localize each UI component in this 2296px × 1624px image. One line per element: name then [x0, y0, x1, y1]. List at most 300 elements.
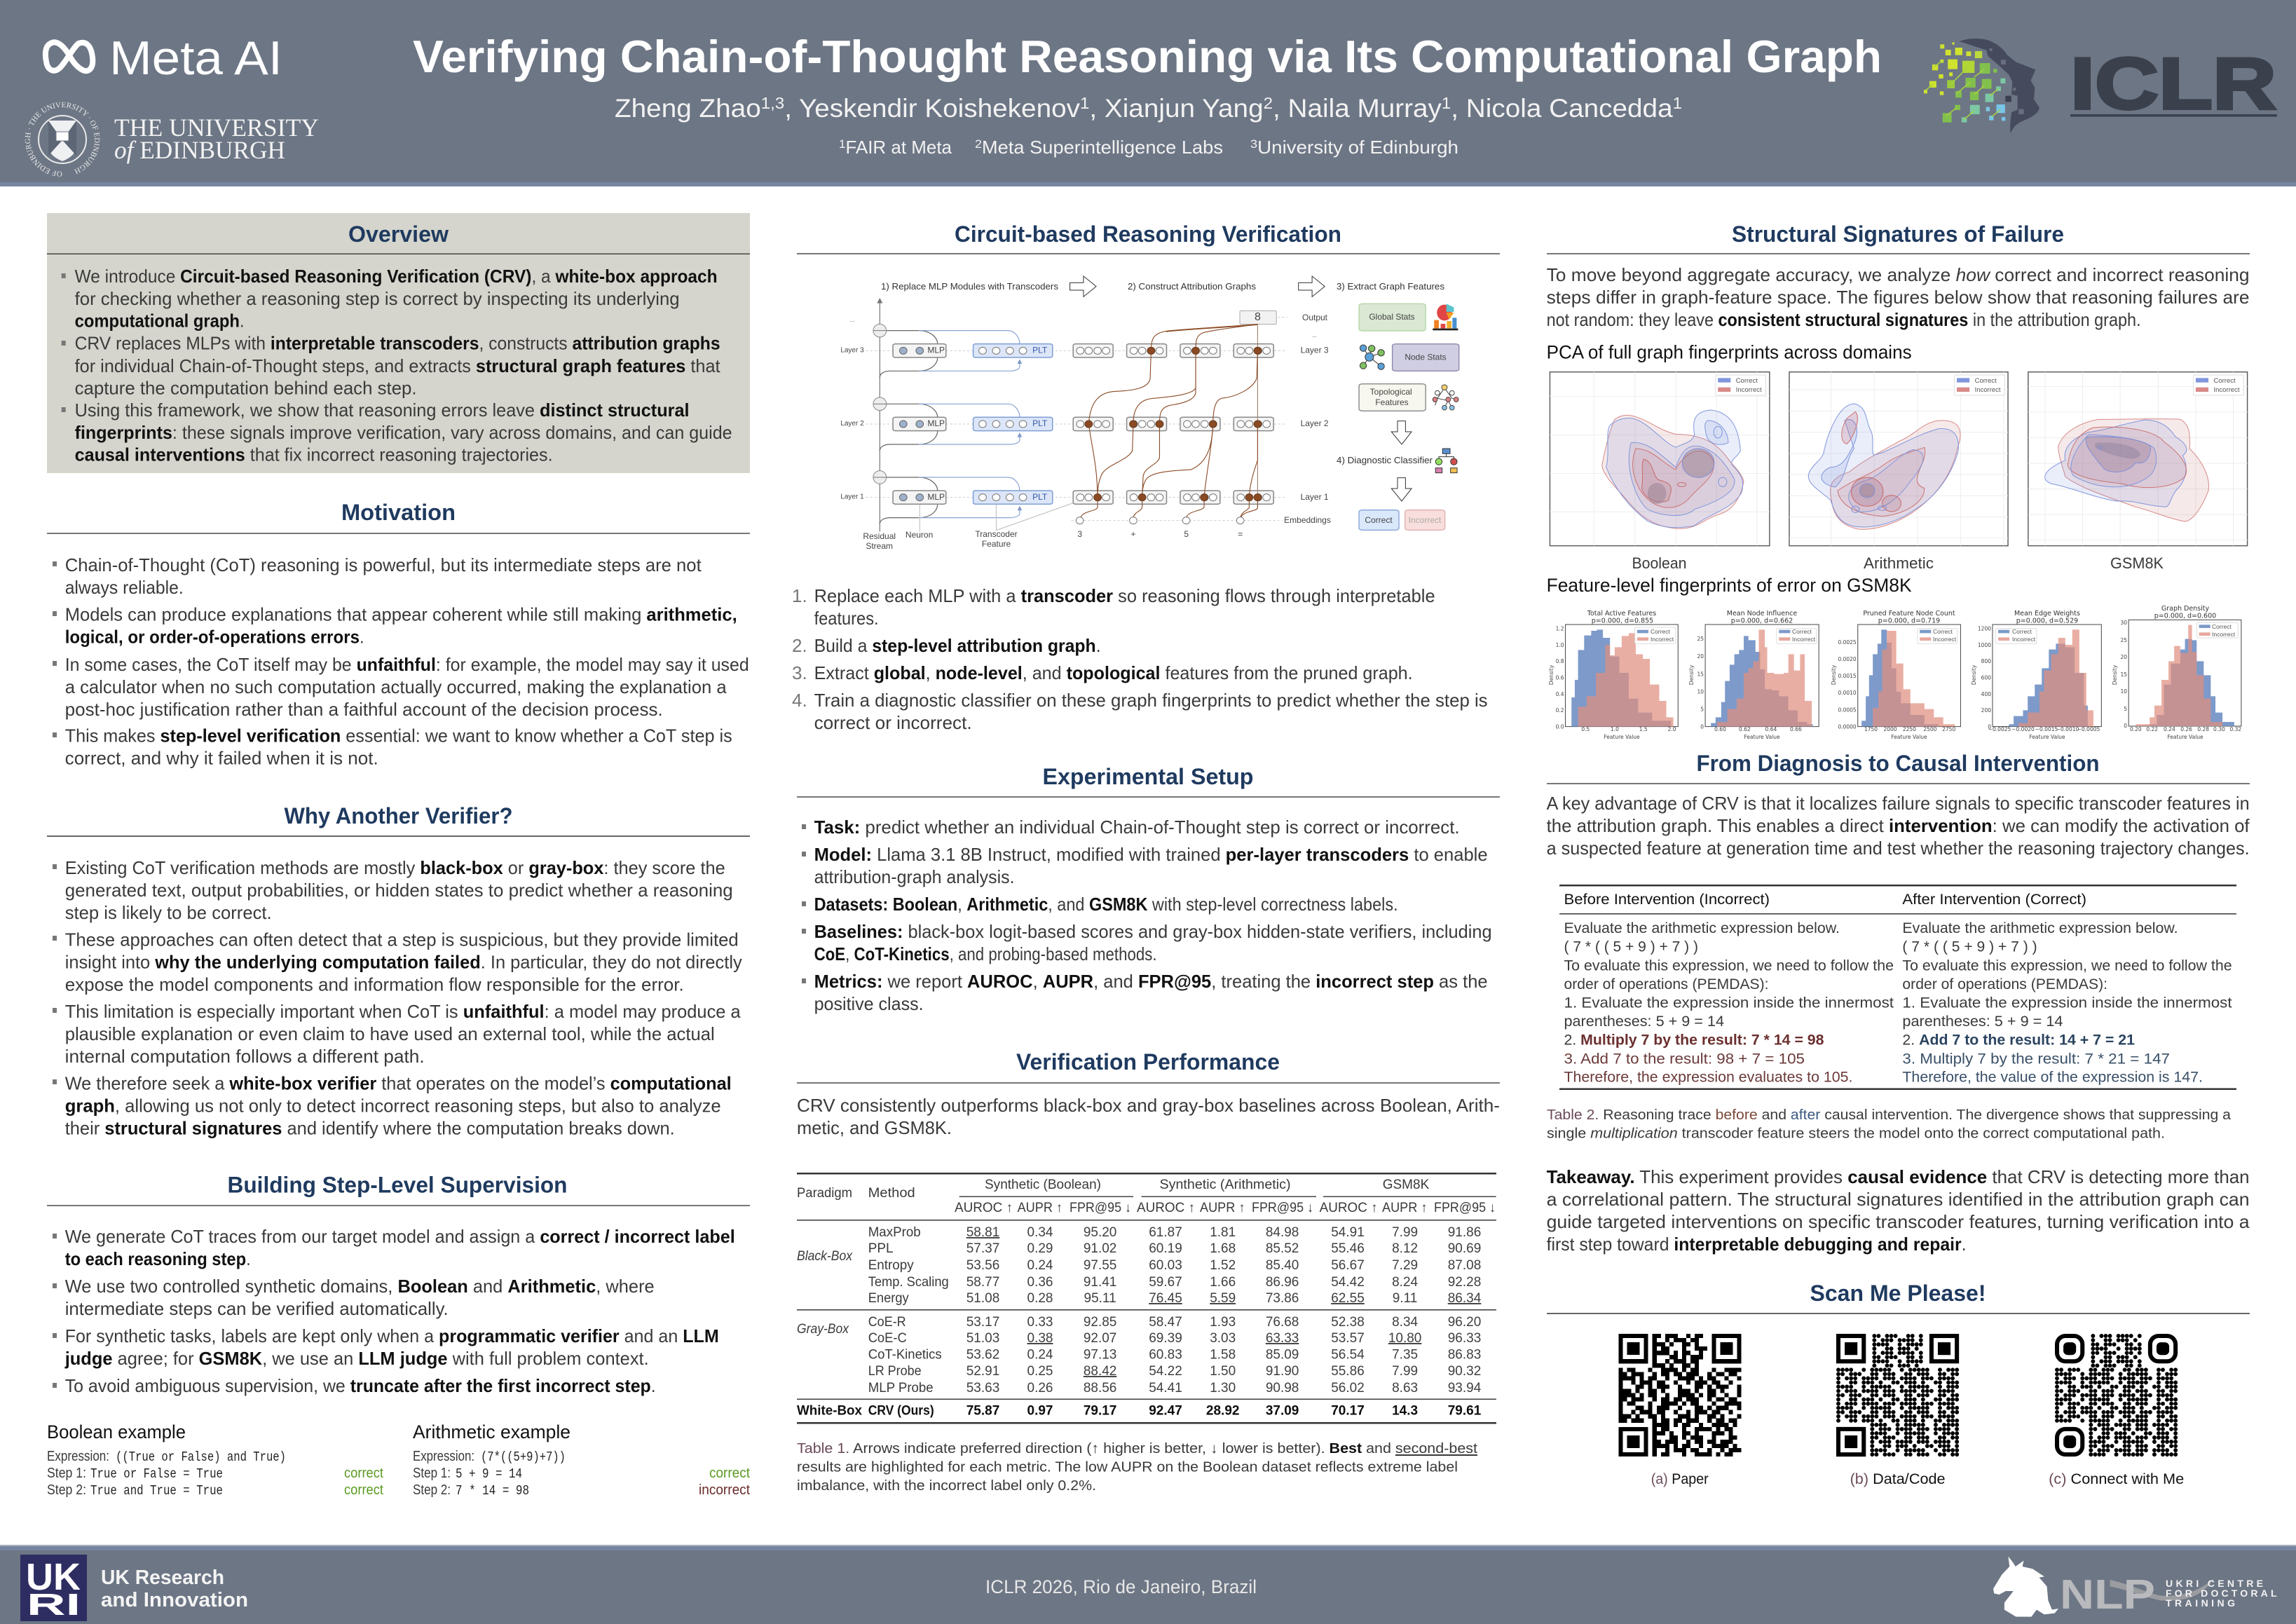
results table: 7.29: [1392, 1258, 1418, 1273]
histogram labels: 0.4: [1556, 691, 1564, 697]
histogram labels: Incorrect: [1792, 636, 1816, 643]
column: before intervention: parentheses: 5 + 9 = 14: [1564, 1014, 1724, 1030]
text: overview bullets: CRV replaces MLPs with interpretable transcoders, constructs attribution graphs: [75, 332, 720, 353]
text: motivation bullets: [53, 554, 749, 768]
icon: node graph: [1360, 345, 1384, 369]
text: supervision bullets: intermediate steps can be verified automatically.: [65, 1298, 449, 1319]
numbered steps: 4.: [792, 690, 807, 711]
heading: why another verifier: Why Another Verifier?: [285, 803, 513, 828]
results table: 37.09: [1266, 1403, 1299, 1419]
results table: 53.57: [1331, 1331, 1365, 1346]
diagram labels: Layer 3: [1301, 345, 1329, 355]
column: before intervention: To evaluate this expression, we need to follow the: [1564, 957, 1894, 974]
results table: 56.67: [1331, 1258, 1365, 1273]
table 1 caption: [797, 1440, 1477, 1494]
diagram labels: PLT: [1032, 492, 1048, 502]
panel: verification performance: [797, 1049, 1500, 1494]
text: motivation bullets: In some cases, the CoT itself may be unfaithful: for example, the model may say it used: [65, 654, 749, 675]
histogram labels: 0.5: [1581, 726, 1590, 732]
example: boolean: True and True = True: [90, 1483, 223, 1499]
text: overview bullets: for checking whether a reasoning step is correct by inspecting its underlying: [75, 288, 680, 309]
logo: University of Edinburgh: OF EDINBURGH · THE UNIVERSITY · OF EDINBURGH: [25, 102, 100, 177]
text: overview bullets: computational graph.: [75, 310, 245, 331]
results table: 86.34: [1448, 1291, 1482, 1306]
results table: 0.24: [1027, 1347, 1053, 1363]
histogram labels: 0.20: [2130, 726, 2142, 732]
QR captions: [1651, 1471, 2184, 1487]
histogram labels: Incorrect: [2012, 636, 2036, 643]
logo: ICLR: [1924, 39, 2277, 134]
example: boolean: correct: [344, 1466, 383, 1481]
results table: 1.66: [1210, 1275, 1236, 1290]
results table: 10.80: [1388, 1331, 1421, 1346]
diagram labels: 3) Extract Graph Features: [1337, 282, 1444, 292]
results table: 8.34: [1392, 1315, 1419, 1330]
results table: 60.83: [1149, 1347, 1182, 1363]
histogram labels: Feature Value: [1604, 734, 1640, 740]
results table: 60.03: [1149, 1258, 1182, 1273]
results table: 86.96: [1266, 1275, 1299, 1290]
results table: 9.11: [1393, 1291, 1417, 1306]
histogram: mean node influence: [1705, 625, 1819, 727]
subheading: feature-level: Feature-level fingerprints of error on GSM8K: [1547, 575, 1912, 596]
table 2 caption: single multiplication transcoder feature steers the model onto the correct computational path.: [1547, 1126, 2165, 1141]
results table: 0.34: [1027, 1225, 1053, 1240]
text: diagnosis intro: the attribution graph. This enables a direct intervention: we can modify the activation of: [1547, 815, 2250, 836]
histogram labels: 20: [2120, 654, 2127, 660]
diagram labels: 2) Construct Attribution Graphs: [1128, 282, 1256, 292]
panel: overview: [47, 213, 750, 473]
histogram labels: 0.60: [1714, 726, 1726, 732]
histogram labels: 400: [1981, 691, 1991, 697]
histogram labels: −0.0020: [2011, 726, 2035, 732]
affiliations: [839, 137, 1458, 158]
numbered steps: Build a step-level attribution graph.: [814, 635, 1101, 656]
histogram labels: 0.0005: [1838, 707, 1857, 714]
histogram labels: Density: [1688, 664, 1695, 685]
histogram labels: p=0.000, d=0.855: [1592, 617, 1653, 625]
histogram labels: 0.0: [1556, 723, 1564, 730]
text: performance intro: CRV consistently outperforms black-box and gray-box baselines across Boolean, Arith-: [797, 1095, 1500, 1116]
histogram labels: −0.0010: [2056, 726, 2079, 732]
histogram labels: 0.28: [2197, 726, 2209, 732]
diagram labels: 3: [1077, 529, 1082, 539]
diagram labels: Layer 2: [1301, 418, 1329, 428]
results table: 92.85: [1084, 1315, 1116, 1330]
text: performance intro: [797, 1095, 1500, 1138]
PCA legend text and labels: Incorrect: [2213, 386, 2240, 394]
example: boolean: Boolean example: [47, 1421, 186, 1442]
diagram labels: [840, 282, 1447, 551]
text: motivation bullets: Chain-of-Thought (CoT) reasoning is powerful, but its intermediate steps are not: [65, 554, 702, 575]
histogram labels: 0: [1988, 723, 1991, 730]
text: supervision bullets: To avoid ambiguous supervision, we truncate after the first incorrect step.: [65, 1375, 656, 1396]
histogram labels: Correct: [2212, 623, 2232, 630]
heading: scan me: Scan Me Please!: [1810, 1281, 1986, 1306]
panel: from diagnosis to causal intervention: [1547, 751, 2250, 1255]
results table: Black-Box: [797, 1249, 853, 1264]
authors: , Nicola Cancedda: [1451, 94, 1673, 123]
numbered steps: correct or incorrect.: [814, 712, 972, 733]
column: after intervention: 2. Add 7 to the result: 14 + 7 = 21: [1902, 1032, 2135, 1049]
histogram labels: 2000: [1883, 726, 1897, 732]
histogram labels: Pruned Feature Node Count: [1863, 610, 1955, 617]
logo: NLP centre: TRAINING: [2166, 1597, 2235, 1609]
results table: 91.86: [1448, 1225, 1481, 1240]
histogram labels: 0.32: [2229, 726, 2241, 732]
text: motivation bullets: correct, and why it failed when it is not.: [65, 747, 378, 768]
chart: GSM8K KDE: [2028, 372, 2248, 546]
results table: 1.52: [1210, 1258, 1236, 1273]
text: diagnosis intro: a suspected feature at generation time and test whether the reasoning trajectory changes.: [1547, 838, 2250, 859]
histogram labels: −0.0025: [1988, 726, 2011, 732]
histogram labels: 5: [1700, 707, 1704, 712]
results table: CoE-R: [868, 1315, 906, 1330]
results table: 58.77: [966, 1275, 999, 1290]
results table: 59.67: [1149, 1275, 1182, 1290]
text: verifier bullets: This limitation is especially important when CoT is unfaithful: a model may produce a: [65, 1001, 741, 1022]
results table: 8.63: [1392, 1381, 1418, 1396]
results table: GSM8K: [1383, 1178, 1430, 1192]
panel: circuit-based reasoning verification: [792, 221, 1500, 733]
text: supervision bullets: We use two controlled synthetic domains, Boolean and Arithmetic, where: [65, 1276, 655, 1297]
results table: FPR@95 ↓: [1434, 1201, 1496, 1215]
results table: 53.17: [966, 1315, 999, 1330]
QR captions: (b) Data/Code: [1850, 1471, 1946, 1487]
histogram labels: Graph Density: [2161, 605, 2210, 613]
results table: 57.37: [966, 1241, 999, 1256]
histogram labels: Density: [2112, 664, 2118, 685]
column: after intervention: order of operations (PEMDAS):: [1902, 976, 2107, 992]
text: structural intro: [1547, 264, 2250, 330]
results table: 84.98: [1266, 1225, 1299, 1240]
logo: UKRI: UK: [26, 1556, 81, 1598]
histogram labels: 1000: [1978, 642, 1991, 648]
text: setup bullets: Baselines: black-box logit-based scores and gray-box hidden-state verifiers, including: [814, 921, 1492, 942]
diagram labels: MLP: [927, 418, 945, 428]
diagram labels: Transcoder: [975, 529, 1018, 539]
numbered steps: [792, 585, 1488, 733]
numbered steps: 2.: [792, 635, 807, 656]
text: supervision bullets: to each reasoning step.: [65, 1248, 251, 1269]
heading: experimental setup: Experimental Setup: [1043, 764, 1253, 789]
example: boolean: correct: [344, 1482, 383, 1498]
histogram labels: Incorrect: [1651, 636, 1674, 643]
text: overview bullets: fingerprints: these signals improve verification, vary across domains, and can guide: [75, 422, 732, 443]
results table: 85.40: [1266, 1258, 1299, 1273]
histogram labels: 800: [1981, 658, 1991, 664]
results table: AUPR ↑: [1018, 1201, 1062, 1215]
histogram labels: 0.62: [1739, 726, 1751, 732]
takeaway: [1547, 1166, 2250, 1255]
text: setup bullets: Datasets: Boolean, Arithmetic, and GSM8K with step-level correctness labels.: [814, 894, 1398, 915]
heading: verification performance: Verification Performance: [1016, 1049, 1280, 1074]
histogram labels: Density: [1548, 664, 1554, 685]
histogram labels: p=0.000, d=0.600: [2154, 613, 2216, 620]
text: motivation bullets: always reliable.: [65, 577, 184, 598]
histogram labels: p=0.000, d=0.662: [1731, 617, 1793, 625]
results table: 0.28: [1027, 1291, 1053, 1306]
logo: Meta AI: [46, 32, 282, 85]
results table: 58.81: [966, 1225, 999, 1240]
results table: Paradigm: [797, 1186, 852, 1201]
authors: , Naila Murray: [1273, 94, 1442, 123]
results table: 7.35: [1392, 1347, 1418, 1363]
intervention table: [1559, 885, 2236, 1090]
text: verifier bullets: We therefore seek a white-box verifier that operates on the model’s computational: [65, 1072, 732, 1093]
column: after intervention: After Intervention (Correct): [1902, 892, 2086, 908]
histogram labels: Mean Edge Weights: [2014, 610, 2080, 617]
results table: MLP Probe: [868, 1381, 934, 1396]
diagram labels: 4) Diagnostic Classifier: [1337, 456, 1433, 465]
histogram labels: 15: [2120, 671, 2127, 678]
histogram labels: Feature Value: [2029, 734, 2065, 740]
diagram labels: Topological: [1370, 387, 1412, 397]
heading: motivation: Motivation: [341, 500, 456, 525]
histogram: pruned feature node count: [1858, 625, 1960, 727]
text: setup bullets: CoE, CoT-Kinetics, and probing-based methods.: [814, 943, 1157, 964]
histogram labels: 1200: [1978, 625, 1991, 632]
results table: 53.63: [966, 1381, 999, 1396]
diagram labels: Output: [1302, 313, 1328, 322]
diagram labels: ...: [1312, 332, 1317, 339]
text: overview bullets: Using this framework, we show that reasoning errors leave distinct structural: [75, 400, 690, 421]
text: verifier bullets: plausible explanation or even claim to have used an external tool, while the actual: [65, 1023, 715, 1044]
text: overview bullets: causal interventions that fix incorrect reasoning trajectories.: [75, 444, 553, 465]
results table: 52.38: [1331, 1315, 1365, 1330]
example: arithmetic: 5 + 9 = 14: [456, 1466, 522, 1482]
PCA legend text and labels: Correct: [1736, 377, 1758, 385]
diagram labels: Stream: [866, 541, 893, 551]
results table: 70.17: [1331, 1403, 1365, 1419]
column: before intervention: [1564, 892, 1894, 1085]
histogram labels: 0.24: [2164, 726, 2175, 732]
results table: 54.42: [1331, 1275, 1365, 1290]
subheading: PCA: PCA of full graph fingerprints across domains: [1547, 342, 1912, 363]
diagram labels: 1) Replace MLP Modules with Transcoders: [881, 282, 1058, 292]
results table: 14.3: [1392, 1403, 1418, 1419]
histogram labels: Correct: [1792, 628, 1812, 635]
histogram labels: 1.0: [1611, 726, 1619, 732]
histogram labels: 15: [1697, 671, 1704, 677]
results table: 86.83: [1448, 1347, 1481, 1363]
results table: 51.03: [966, 1331, 999, 1346]
example: boolean: Expression:: [47, 1449, 109, 1464]
histogram labels: 25: [2120, 637, 2127, 643]
results table: 0.97: [1027, 1403, 1053, 1419]
column: after intervention: 1. Evaluate the expression inside the innermost: [1902, 995, 2232, 1011]
takeaway: guide targeted interventions on specific transcoder features, turning verification into a: [1547, 1211, 2250, 1232]
histogram labels: 0: [1700, 723, 1704, 730]
icon: topology tree: [1433, 385, 1458, 410]
results table: Energy: [868, 1291, 909, 1306]
panel: building step-level supervision: [47, 1172, 750, 1499]
example: boolean: True or False = True: [90, 1466, 223, 1482]
example: arithmetic: incorrect: [699, 1482, 750, 1498]
diagram labels: Incorrect: [1409, 515, 1442, 525]
diagram labels: PLT: [1032, 418, 1048, 428]
numbered steps: Replace each MLP with a transcoder so reasoning flows through interpretable: [814, 585, 1435, 606]
panel: why another verifier: [47, 803, 750, 1138]
diagram labels: Layer 3: [840, 346, 864, 355]
column: before intervention: Evaluate the arithmetic expression below.: [1564, 920, 1840, 936]
histogram labels: 2500: [1923, 726, 1937, 732]
results table: 92.07: [1084, 1331, 1116, 1346]
diagram labels: Node Stats: [1405, 352, 1447, 362]
histogram labels: Correct: [2012, 628, 2032, 635]
results table: 85.52: [1266, 1241, 1299, 1256]
histogram labels: Density: [1971, 664, 1977, 685]
icon: classifier tree: [1435, 449, 1457, 473]
histogram labels: Incorrect: [2212, 631, 2236, 638]
results table: 95.11: [1084, 1291, 1116, 1306]
logo: UKRI: RI: [27, 1588, 81, 1622]
results table: PPL: [868, 1241, 894, 1256]
text: verifier bullets: step is likely to be correct.: [65, 902, 272, 923]
results table: 87.08: [1448, 1258, 1481, 1273]
panel: scan me please: [1547, 1281, 2250, 1487]
histogram labels: 0.2: [1556, 707, 1564, 714]
authors: 1: [1673, 94, 1682, 112]
example: arithmetic: 7 * 14 = 98: [456, 1483, 529, 1499]
results table: 90.32: [1448, 1364, 1481, 1379]
text: structural intro: not random: they leave consistent structural signatures in the attribution graph.: [1547, 309, 2141, 330]
numbered steps: 1.: [792, 585, 807, 606]
QR captions: (a) Paper: [1651, 1471, 1709, 1487]
results table: 0.25: [1027, 1364, 1053, 1379]
column: after intervention: ( 7 * ( ( 5 + 9 ) + 7 ) ): [1902, 939, 2037, 955]
text: supervision bullets: For synthetic tasks, labels are kept only when a programmatic verifier and an LLM: [65, 1325, 719, 1346]
affiliations: 2: [975, 137, 982, 151]
results table: 91.02: [1084, 1241, 1116, 1256]
text: verifier bullets: insight into why the underlying computation failed. In particular, they do not directly: [65, 952, 742, 973]
heading: structural signatures: Structural Signatures of Failure: [1732, 221, 2064, 247]
results table: 76.45: [1149, 1291, 1182, 1306]
text: verifier bullets: These approaches can often detect that a step is suspicious, but they provide limited: [65, 929, 739, 950]
column: after intervention: 3. Multiply 7 by the result: 7 * 21 = 147: [1902, 1051, 2170, 1067]
numbered steps: Extract global, node-level, and topological features from the pruned graph.: [814, 662, 1413, 683]
results table: 75.87: [966, 1403, 999, 1419]
table 1 caption: results are highlighted for each metric. The low AUPR on the Boolean dataset reflects extreme label: [797, 1459, 1458, 1475]
authors: 1: [1080, 94, 1089, 112]
chart: PCA density plots: [1550, 372, 2248, 572]
text: motivation bullets: a calculator when no such computation actually occurred, making the explanation a: [65, 676, 727, 697]
histogram: total active features: [1566, 625, 1678, 727]
column: before intervention: ( 7 * ( ( 5 + 9 ) + 7 ) ): [1564, 939, 1698, 955]
example: boolean: ((True or False) and True): [116, 1449, 286, 1465]
histogram labels: Feature Value: [1744, 734, 1780, 740]
text: supervision bullets: judge agree; for GSM8K, we use an LLM judge with full problem context.: [64, 1348, 649, 1369]
histogram labels: Mean Node Influence: [1727, 610, 1797, 617]
diagram labels: Global Stats: [1369, 312, 1415, 322]
authors: 1: [1442, 94, 1451, 112]
diagram labels: Feature: [982, 539, 1011, 549]
diagram labels: Correct: [1365, 515, 1393, 525]
results table: 1.93: [1210, 1315, 1236, 1330]
panel: experimental setup: [797, 764, 1500, 1014]
histogram labels: 1.2: [1556, 625, 1564, 632]
example: arithmetic: Arithmetic example: [413, 1421, 570, 1442]
histogram labels: p=0.000, d=0.529: [2016, 617, 2078, 625]
results table: 3.03: [1210, 1331, 1236, 1346]
histogram labels: Incorrect: [1933, 636, 1957, 643]
results table: 1.30: [1210, 1381, 1236, 1396]
affiliations: 3: [1250, 137, 1257, 151]
results table: AUROC ↑: [1137, 1201, 1195, 1215]
example: arithmetic: [413, 1421, 750, 1499]
column: after intervention: Evaluate the arithmetic expression below.: [1902, 920, 2178, 936]
histogram labels: 0.30: [2213, 726, 2225, 732]
PCA legend text and labels: Arithmetic: [1864, 554, 1934, 572]
text: supervision bullets: [53, 1226, 735, 1396]
histogram labels: 1.5: [1639, 726, 1648, 732]
logo: University of Edinburgh: [25, 102, 319, 177]
histogram labels: 0.64: [1765, 726, 1777, 732]
PCA legend text and labels: GSM8K: [2110, 554, 2164, 572]
results table: AUROC ↑: [1320, 1201, 1378, 1215]
diagram labels: +: [1130, 529, 1136, 539]
histogram labels: 600: [1981, 674, 1991, 681]
text: performance intro: metic, and GSM8K.: [797, 1117, 952, 1138]
text: structural intro: steps differ in graph-feature space. The figures below show that reasoning failures are: [1547, 287, 2250, 308]
column: after intervention: To evaluate this expression, we need to follow the: [1902, 957, 2232, 974]
results table: AUPR ↑: [1382, 1201, 1427, 1215]
results table: LR Probe: [868, 1364, 922, 1379]
column: before intervention: Therefore, the expression evaluates to 105.: [1564, 1070, 1853, 1085]
histogram labels: 0.8: [1556, 658, 1564, 664]
text: motivation bullets: logical, or order-of-operations errors.: [65, 627, 364, 648]
results table: 92.47: [1149, 1403, 1182, 1419]
results table: White-Box: [797, 1403, 862, 1419]
histogram labels: 0.66: [1790, 726, 1802, 732]
results table: 8.24: [1392, 1275, 1419, 1290]
results table: 56.54: [1331, 1347, 1365, 1363]
results table: 69.39: [1149, 1331, 1182, 1346]
histogram labels: 0: [2124, 723, 2127, 729]
pipeline diagram: [840, 276, 1459, 551]
results table: 85.09: [1266, 1347, 1299, 1363]
diagram labels: MLP: [927, 345, 945, 355]
diagram labels: Embeddings: [1284, 515, 1331, 525]
PCA legend text and labels: Incorrect: [1975, 386, 2001, 394]
logo: UKRI: and Innovation: [101, 1589, 248, 1611]
histogram: graph density: [2128, 620, 2241, 726]
text: verifier bullets: internal computation follows a different path.: [65, 1046, 425, 1067]
results table: 0.29: [1027, 1241, 1053, 1256]
panel: motivation: [47, 500, 750, 768]
text: setup bullets: [802, 817, 1492, 1014]
authors: Zheng Zhao: [615, 94, 755, 123]
results table: 53.56: [966, 1258, 999, 1273]
PCA legend text and labels: Correct: [1975, 377, 1997, 385]
example: boolean: [47, 1421, 383, 1499]
example: boolean: Step 1:: [47, 1466, 86, 1481]
results table: 54.41: [1149, 1381, 1182, 1396]
histogram labels: 10: [2120, 688, 2127, 695]
text: overview bullets: We introduce Circuit-based Reasoning Verification (CRV), a white-box approach: [75, 266, 718, 287]
text: setup bullets: positive class.: [814, 993, 924, 1014]
diagram labels: Layer 1: [1301, 492, 1329, 502]
results table: 97.13: [1084, 1347, 1116, 1363]
results table: 60.19: [1149, 1241, 1182, 1256]
panel: structural signatures of failure: [1547, 221, 2250, 740]
text: motivation bullets: post-hoc justification rather than a faithful account of the decision process.: [65, 699, 663, 720]
logo: University of Edinburgh: THE UNIVERSITY: [114, 114, 319, 142]
results table: 54.22: [1149, 1364, 1182, 1379]
logo: Meta AI: Meta AI: [109, 32, 282, 85]
results table: 1.50: [1210, 1364, 1236, 1379]
logo: NLP centre: NLP: [2060, 1571, 2155, 1618]
